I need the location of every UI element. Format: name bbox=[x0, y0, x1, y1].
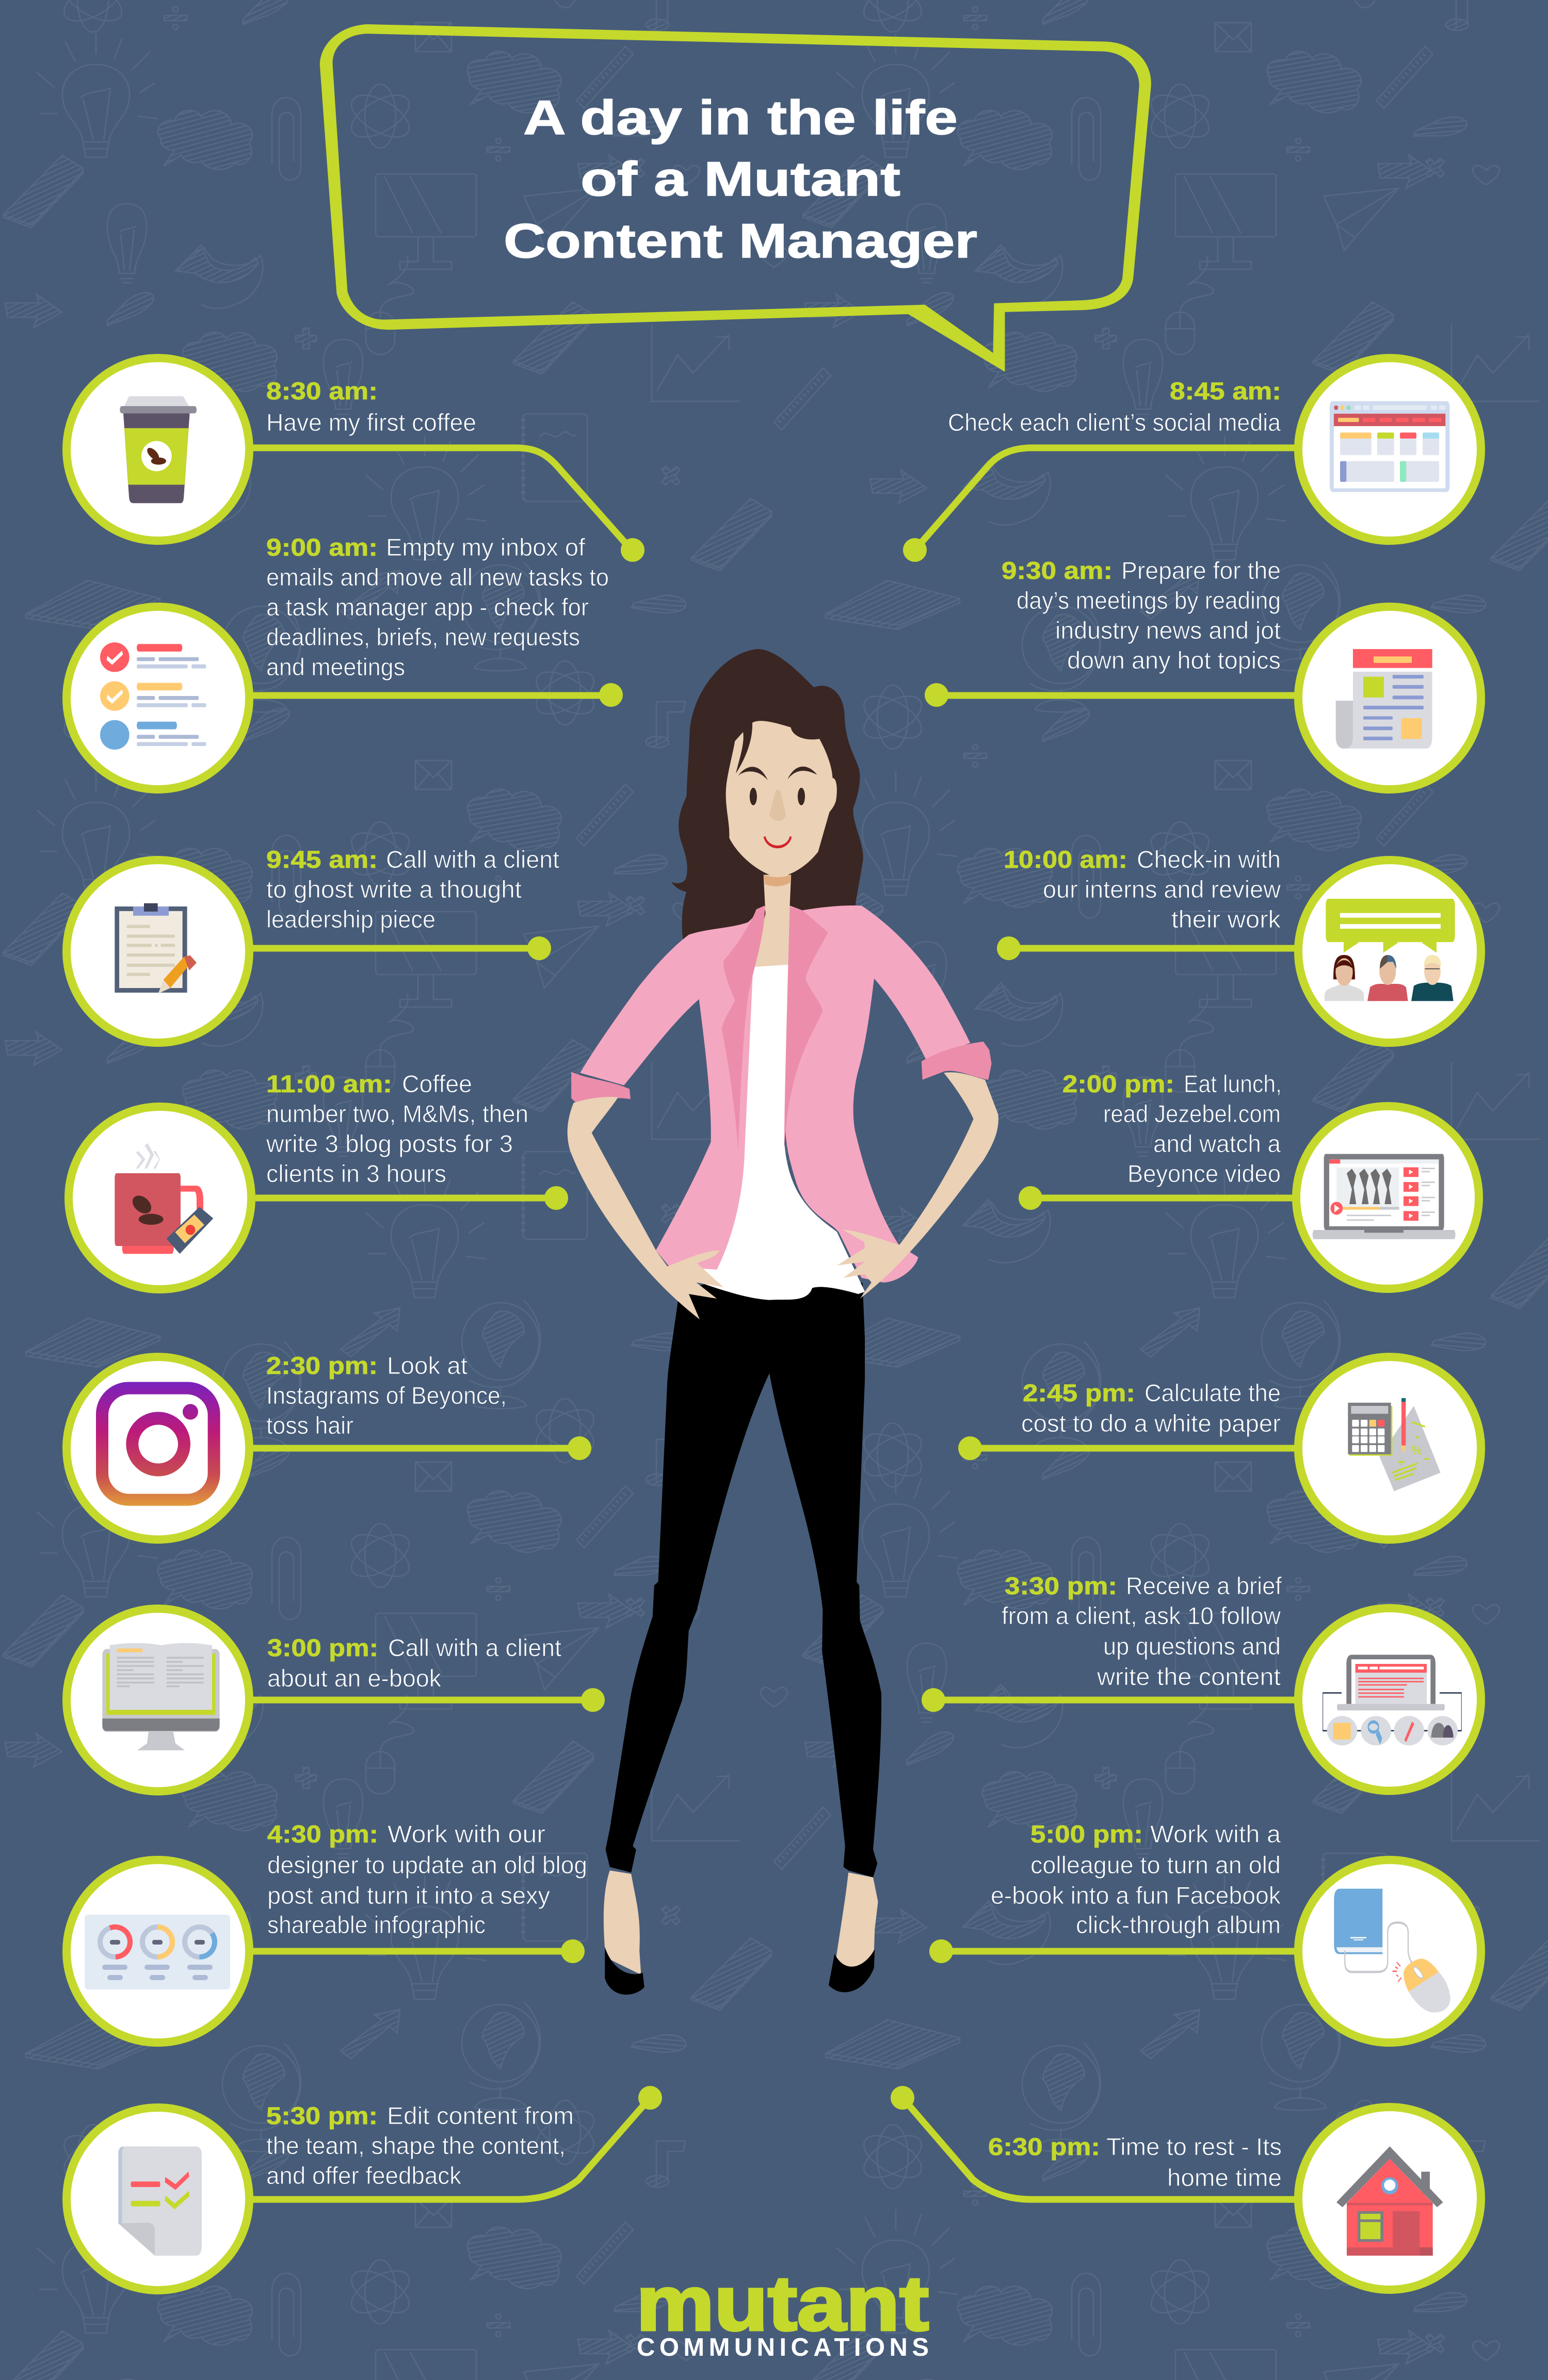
text: emails and move all new tasks to bbox=[266, 563, 609, 591]
badge circle bbox=[69, 1107, 251, 1289]
text: Calculate the bbox=[1144, 1379, 1281, 1406]
text: down any hot topics bbox=[1067, 646, 1281, 674]
icon: monitor with book bbox=[102, 1643, 220, 1751]
connector bbox=[937, 692, 1295, 699]
character: woman in pink jacket bbox=[568, 649, 998, 1995]
icon: instagram logo bbox=[96, 1382, 220, 1506]
text: up questions and bbox=[1103, 1632, 1281, 1660]
text: colleague to turn an old bbox=[1030, 1851, 1281, 1879]
text bbox=[988, 2133, 1282, 2191]
connector dot bbox=[527, 936, 551, 960]
text: home time bbox=[1167, 2164, 1282, 2191]
text: Look at bbox=[387, 1352, 467, 1379]
text bbox=[1021, 1379, 1281, 1437]
text: Call with a client bbox=[388, 1634, 561, 1661]
step: 4:30 pm infographic bbox=[67, 1820, 587, 2043]
text bbox=[266, 1070, 528, 1187]
arms and hands bbox=[568, 1072, 998, 1319]
icon: social dashboard browser bbox=[1330, 401, 1449, 492]
text: 8:45 am: bbox=[1170, 377, 1281, 404]
text: Edit content from bbox=[387, 2102, 574, 2129]
icon: mug and candy bbox=[115, 1143, 213, 1254]
text: Check each client’s social media bbox=[948, 409, 1281, 436]
connector bbox=[941, 1948, 1295, 1954]
connector bbox=[253, 692, 611, 699]
connector dot bbox=[544, 1186, 568, 1210]
text bbox=[266, 2102, 574, 2189]
text: 11:00 am: bbox=[266, 1070, 392, 1097]
badge circle bbox=[67, 1860, 249, 2043]
connector bbox=[253, 945, 539, 951]
text: a task manager app - check for bbox=[266, 593, 589, 621]
icon: newspaper bbox=[1336, 649, 1432, 749]
text: designer to update an old blog bbox=[267, 1851, 587, 1879]
badge circle bbox=[67, 1357, 249, 1540]
text: Time to rest - Its bbox=[1106, 2133, 1282, 2160]
badge circle bbox=[1298, 2107, 1481, 2290]
text: number two, M&Ms, then bbox=[266, 1100, 528, 1127]
text: the team, shape the content, bbox=[266, 2132, 566, 2159]
text: 4:30 pm: bbox=[267, 1820, 378, 1848]
text bbox=[948, 377, 1281, 436]
text: to ghost write a thought bbox=[266, 876, 522, 903]
connector dot bbox=[997, 936, 1021, 960]
badge circle bbox=[67, 358, 249, 541]
connector dot bbox=[891, 2086, 914, 2110]
pink jacket bbox=[580, 905, 970, 1283]
lower body bbox=[604, 1280, 881, 1995]
text: 2:45 pm: bbox=[1023, 1379, 1135, 1406]
text: about an e-book bbox=[267, 1664, 441, 1692]
text: clients in 3 hours bbox=[266, 1160, 446, 1187]
title: A day in the life bbox=[523, 90, 958, 144]
connector bbox=[915, 448, 1295, 550]
text: Call with a client bbox=[386, 846, 559, 873]
step: 11:00 am blog posts bbox=[69, 1070, 568, 1289]
connector dot bbox=[638, 2086, 662, 2110]
connector dot bbox=[568, 1436, 591, 1460]
step: 5:30 pm edit content bbox=[67, 2086, 662, 2290]
step: 6:30 pm home time bbox=[891, 2086, 1481, 2290]
icon: three people with speech box bbox=[1325, 899, 1455, 1001]
connector dot bbox=[929, 1939, 953, 1963]
connector dot bbox=[621, 538, 644, 562]
text: 8:30 am: bbox=[266, 377, 378, 404]
badge circle bbox=[1298, 607, 1481, 789]
text: day’s meetings by reading bbox=[1017, 587, 1281, 614]
step: 5:00 pm facebook album bbox=[929, 1820, 1481, 2043]
text: write the content bbox=[1096, 1663, 1281, 1690]
badge circle bbox=[67, 607, 249, 789]
text bbox=[991, 1820, 1281, 1938]
neck bbox=[751, 875, 791, 969]
step: 9:45 am client call bbox=[67, 846, 559, 1043]
badge circle bbox=[67, 2108, 249, 2290]
text: Empty my inbox of bbox=[386, 533, 586, 561]
icon: laptop with tools bbox=[1323, 1655, 1461, 1745]
title: of a Mutant bbox=[580, 152, 900, 206]
text: and meetings bbox=[266, 653, 405, 681]
text: 5:00 pm: bbox=[1030, 1820, 1143, 1848]
text bbox=[266, 533, 609, 681]
step: 2:00 pm lunch bbox=[1019, 1070, 1479, 1289]
connector dot bbox=[561, 1939, 585, 1963]
text: Instagrams of Beyonce, bbox=[266, 1382, 507, 1409]
badge circle bbox=[1298, 860, 1481, 1043]
text: 9:00 am: bbox=[266, 533, 378, 561]
icon: task list bbox=[100, 642, 206, 750]
wordmark: mutant bbox=[636, 2260, 929, 2346]
text: 9:30 am: bbox=[1002, 557, 1112, 584]
text: Prepare for the bbox=[1121, 557, 1281, 584]
text: their work bbox=[1171, 905, 1281, 933]
eyes, brows, nose, smile bbox=[738, 767, 817, 847]
text: toss hair bbox=[266, 1412, 353, 1439]
step: 9:00 am inbox bbox=[67, 533, 623, 789]
text bbox=[266, 1352, 507, 1439]
text: Have my first coffee bbox=[266, 409, 476, 436]
text: Receive a brief bbox=[1126, 1572, 1282, 1599]
text: deadlines, briefs, new requests bbox=[266, 623, 580, 651]
icon: calculator, paper and pencil bbox=[1348, 1398, 1441, 1491]
text bbox=[266, 377, 476, 436]
text: write 3 blog posts for 3 bbox=[266, 1130, 513, 1157]
step: 3:00 pm e-book call bbox=[67, 1609, 605, 1791]
title speech bubble bbox=[320, 24, 1151, 371]
connector bbox=[253, 448, 632, 550]
text: Eat lunch, bbox=[1184, 1070, 1282, 1097]
text: 3:00 pm: bbox=[267, 1634, 378, 1661]
connector dot bbox=[599, 683, 623, 707]
step: 2:30 pm instagram bbox=[67, 1352, 591, 1540]
icon: reviewed document bbox=[118, 2146, 202, 2256]
logo: mutant communications bbox=[636, 2260, 929, 2361]
text: 2:30 pm: bbox=[266, 1352, 378, 1379]
shoes bbox=[605, 1947, 875, 1995]
title bbox=[504, 90, 977, 268]
connector bbox=[933, 1696, 1295, 1704]
badge circle bbox=[1298, 1608, 1481, 1791]
sub-brand: COMMUNICATIONS bbox=[637, 2334, 929, 2361]
badge circle bbox=[67, 860, 249, 1043]
icon: dashboard dials bbox=[85, 1915, 230, 1989]
text: Beyonce video bbox=[1127, 1160, 1281, 1187]
text bbox=[1002, 557, 1281, 674]
black leggings bbox=[605, 1280, 881, 1877]
text: Work with a bbox=[1150, 1820, 1281, 1848]
connector bbox=[1030, 1195, 1295, 1201]
text: 10:00 am: bbox=[1004, 846, 1127, 873]
connector bbox=[255, 1195, 556, 1201]
text bbox=[1002, 1572, 1282, 1690]
face bbox=[726, 721, 837, 877]
text bbox=[1062, 1070, 1282, 1187]
icon: laptop with video bbox=[1313, 1154, 1456, 1239]
icon: e-book and mouse bbox=[1334, 1889, 1450, 2013]
connector dot bbox=[581, 1688, 605, 1712]
icon: calculator, paper and pencil: % bbox=[1411, 1444, 1422, 1458]
text: 6:30 pm: bbox=[988, 2133, 1100, 2160]
text: leadership piece bbox=[266, 905, 436, 933]
step: 10:00 am interns bbox=[997, 846, 1481, 1043]
lapels and cuffs bbox=[571, 905, 992, 1154]
text: 2:00 pm: bbox=[1062, 1070, 1174, 1097]
text: our interns and review bbox=[1043, 876, 1281, 903]
connector bbox=[253, 1696, 593, 1704]
step: 3:30 pm brief bbox=[922, 1572, 1481, 1791]
text: 9:45 am: bbox=[266, 846, 378, 873]
white top bbox=[697, 965, 865, 1300]
text: cost to do a white paper bbox=[1021, 1410, 1281, 1437]
text: Coffee bbox=[402, 1070, 472, 1097]
connector bbox=[253, 1948, 573, 1954]
step: 8:45 am social media bbox=[903, 358, 1481, 562]
text bbox=[266, 846, 559, 933]
title: Content Manager bbox=[504, 214, 977, 268]
connector bbox=[253, 1445, 579, 1452]
text: click-through album bbox=[1076, 1911, 1281, 1938]
upper body bbox=[568, 649, 998, 1319]
hair bbox=[671, 649, 863, 942]
badge circle bbox=[1296, 1106, 1479, 1289]
connector dot bbox=[958, 1436, 982, 1460]
icon: clipboard and pencil bbox=[115, 903, 197, 994]
connector dot bbox=[922, 1688, 945, 1712]
icon: coffee cup bbox=[120, 396, 197, 503]
badge circle bbox=[1298, 1860, 1481, 2043]
connector dot bbox=[1019, 1186, 1042, 1210]
connector dot bbox=[925, 683, 948, 707]
text bbox=[267, 1820, 587, 1938]
icon: house bbox=[1336, 2146, 1443, 2256]
text: Check-in with bbox=[1137, 846, 1281, 873]
neck shadow bbox=[764, 875, 791, 886]
text bbox=[267, 1634, 561, 1692]
connector dot bbox=[903, 538, 927, 562]
text: and watch a bbox=[1153, 1130, 1281, 1157]
bubble outline bbox=[320, 24, 1151, 371]
text bbox=[1004, 846, 1281, 933]
text: post and turn it into a sexy bbox=[267, 1882, 550, 1909]
badge circle bbox=[67, 1609, 249, 1791]
text: shareable infographic bbox=[267, 1911, 486, 1938]
connector bbox=[1009, 945, 1295, 951]
text: 3:30 pm: bbox=[1005, 1572, 1117, 1599]
text: and offer feedback bbox=[266, 2162, 461, 2189]
connector bbox=[970, 1445, 1295, 1452]
text: read Jezebel.com bbox=[1103, 1100, 1281, 1127]
connector bbox=[902, 2098, 1295, 2199]
connector bbox=[253, 2098, 650, 2199]
text: e-book into a fun Facebook bbox=[991, 1882, 1281, 1909]
step: 9:30 am hot topics bbox=[925, 557, 1481, 789]
text: from a client, ask 10 follow bbox=[1002, 1602, 1281, 1629]
text: Work with our bbox=[388, 1820, 545, 1848]
text: industry news and jot bbox=[1055, 617, 1281, 644]
text: 5:30 pm: bbox=[266, 2102, 378, 2129]
badge circle bbox=[1298, 1357, 1481, 1540]
step: 8:30 am first coffee bbox=[67, 358, 644, 562]
feet bbox=[604, 1870, 878, 1974]
step: 2:45 pm white paper cost bbox=[958, 1357, 1481, 1540]
badge circle bbox=[1298, 358, 1481, 541]
